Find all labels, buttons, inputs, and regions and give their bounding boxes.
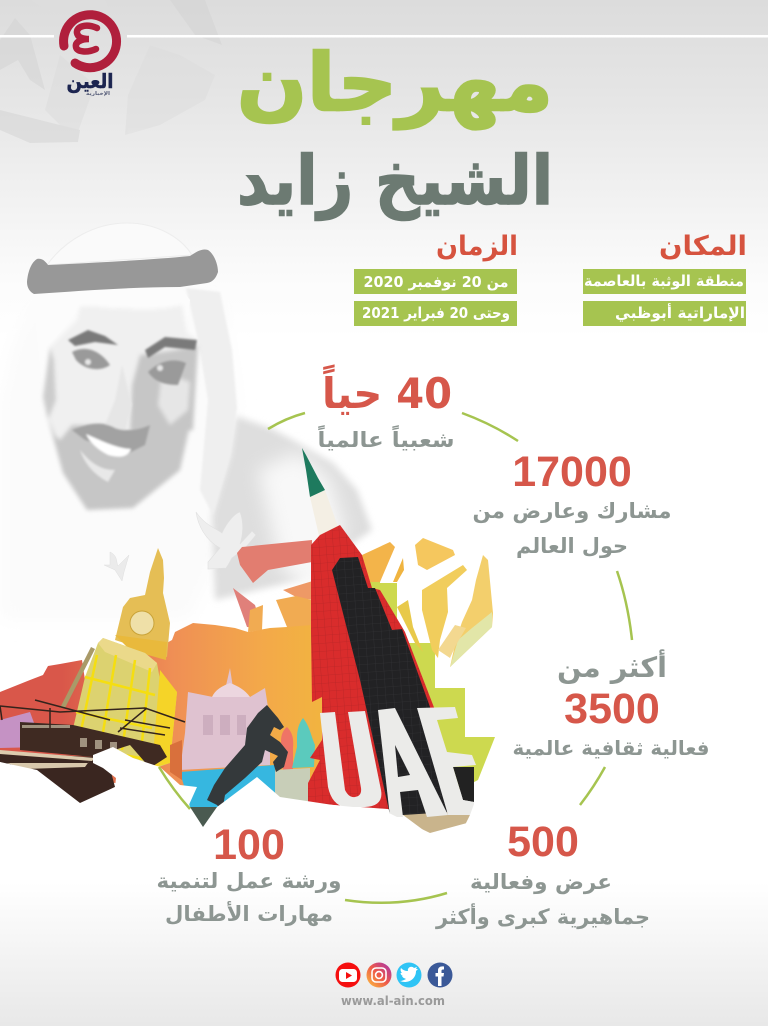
caption: شعبياً عالمياً <box>318 424 454 452</box>
emblem: red fort <box>237 540 312 583</box>
letters UAE <box>320 707 476 817</box>
white spire <box>310 490 348 562</box>
deck house <box>20 722 167 768</box>
tower: yellow tall block <box>68 638 177 770</box>
stat: 500 <box>435 818 650 929</box>
panel: time <box>354 231 518 326</box>
caption: ورشة عمل لتنمية <box>156 869 342 893</box>
label: أكثر من <box>557 649 667 684</box>
portrait: Sheikh Zayed <box>0 223 372 620</box>
ground strip <box>275 768 310 802</box>
stat: 100 <box>156 821 342 926</box>
logo: Al-Ain News <box>64 15 117 97</box>
boat mast <box>60 647 95 708</box>
website: www.al-ain.com <box>341 993 445 1008</box>
logo subtitle: الإخبارية <box>86 91 110 97</box>
date box 1: من 20 نوفمبر 2020 <box>364 273 508 291</box>
place box 2 <box>583 301 746 326</box>
logo ring <box>64 15 117 68</box>
horse statue <box>207 705 288 812</box>
black lower panel behind E <box>453 767 474 802</box>
stat: 40 camps <box>318 364 454 452</box>
rigging <box>0 700 185 735</box>
value: 17000 <box>512 448 632 496</box>
panel: place <box>583 231 747 326</box>
social icons <box>336 962 452 988</box>
infographic connector arcs <box>268 413 632 903</box>
value: 100 <box>213 821 285 869</box>
building: pink fort <box>180 668 275 807</box>
title line 1: مهرجان <box>237 37 553 129</box>
date box 2 <box>354 301 517 326</box>
caption: مشارك وعارض من <box>472 499 672 523</box>
scarf under band <box>33 287 190 397</box>
place box 1: منطقة الوثبة بالعاصمة <box>584 272 744 290</box>
cheek shadow <box>130 345 198 435</box>
blue base <box>180 765 275 807</box>
moustache <box>72 424 150 455</box>
stat: 100: مهارات الأطفال <box>165 900 333 926</box>
head scarf drape <box>0 285 237 620</box>
date box 2: وحتى 20 فبراير 2021 <box>362 304 510 322</box>
green tip <box>302 448 325 497</box>
top rule <box>0 35 768 38</box>
head cap <box>47 223 192 265</box>
caption: عرض وفعالية <box>470 870 612 894</box>
place box 2: الإماراتية أبوظبي <box>615 303 745 322</box>
map: bumps at fort base <box>248 596 312 632</box>
letter A <box>378 708 448 817</box>
shoulder <box>212 416 372 600</box>
emblem: orange dancer <box>362 538 493 667</box>
artwork: map and landmarks <box>0 448 495 835</box>
heading: place: المكان <box>659 231 747 262</box>
tower: clock tower <box>115 548 170 660</box>
chin light <box>80 450 115 482</box>
ground tip <box>190 807 217 827</box>
red face <box>308 525 435 810</box>
letter U <box>320 711 381 807</box>
torn paper edge <box>0 733 520 848</box>
connector arc: lower left <box>159 767 190 809</box>
dhow <box>0 700 185 805</box>
icon: facebook <box>428 962 452 988</box>
stepped green backdrop <box>362 557 495 800</box>
map: orange <box>0 615 345 790</box>
letter E <box>417 707 476 815</box>
stat: 3500 <box>512 649 710 760</box>
hull <box>0 752 115 805</box>
decorative watermark shapes <box>0 0 222 143</box>
title line 2: الشيخ زايد <box>237 142 553 221</box>
icon: twitter <box>396 962 422 988</box>
map: pink patch <box>0 712 43 748</box>
icon: instagram <box>366 962 392 988</box>
date box 1 <box>354 269 517 294</box>
dove: small <box>104 552 129 581</box>
value: 40 حياً <box>322 364 452 418</box>
beard <box>47 400 193 510</box>
stat: 17000 <box>472 448 672 558</box>
teeth <box>86 434 131 457</box>
heading: time: الزمان <box>436 231 518 262</box>
logo letter <box>76 26 97 51</box>
icon: youtube <box>336 962 360 988</box>
value: 500 <box>507 818 579 866</box>
value: 3500 <box>564 685 660 733</box>
tan ground <box>403 812 470 835</box>
logo wordmark: العين <box>66 69 114 93</box>
eyebrows <box>68 330 118 346</box>
black face <box>332 557 450 815</box>
scarf side fold <box>186 288 237 515</box>
nose <box>105 365 132 432</box>
stat: 500: جماهيرية كبرى وأكثر <box>435 902 650 929</box>
caption: فعالية ثقافية عالمية <box>512 736 710 760</box>
tower: Burj <box>302 448 450 815</box>
small colourful domes <box>170 718 315 780</box>
face <box>43 305 198 510</box>
facial features <box>68 330 197 482</box>
dove: large <box>196 512 256 569</box>
head band <box>27 249 218 294</box>
left face shadow <box>43 347 56 420</box>
eyes <box>72 349 110 369</box>
stat: 17000: حول العالم <box>516 534 628 558</box>
